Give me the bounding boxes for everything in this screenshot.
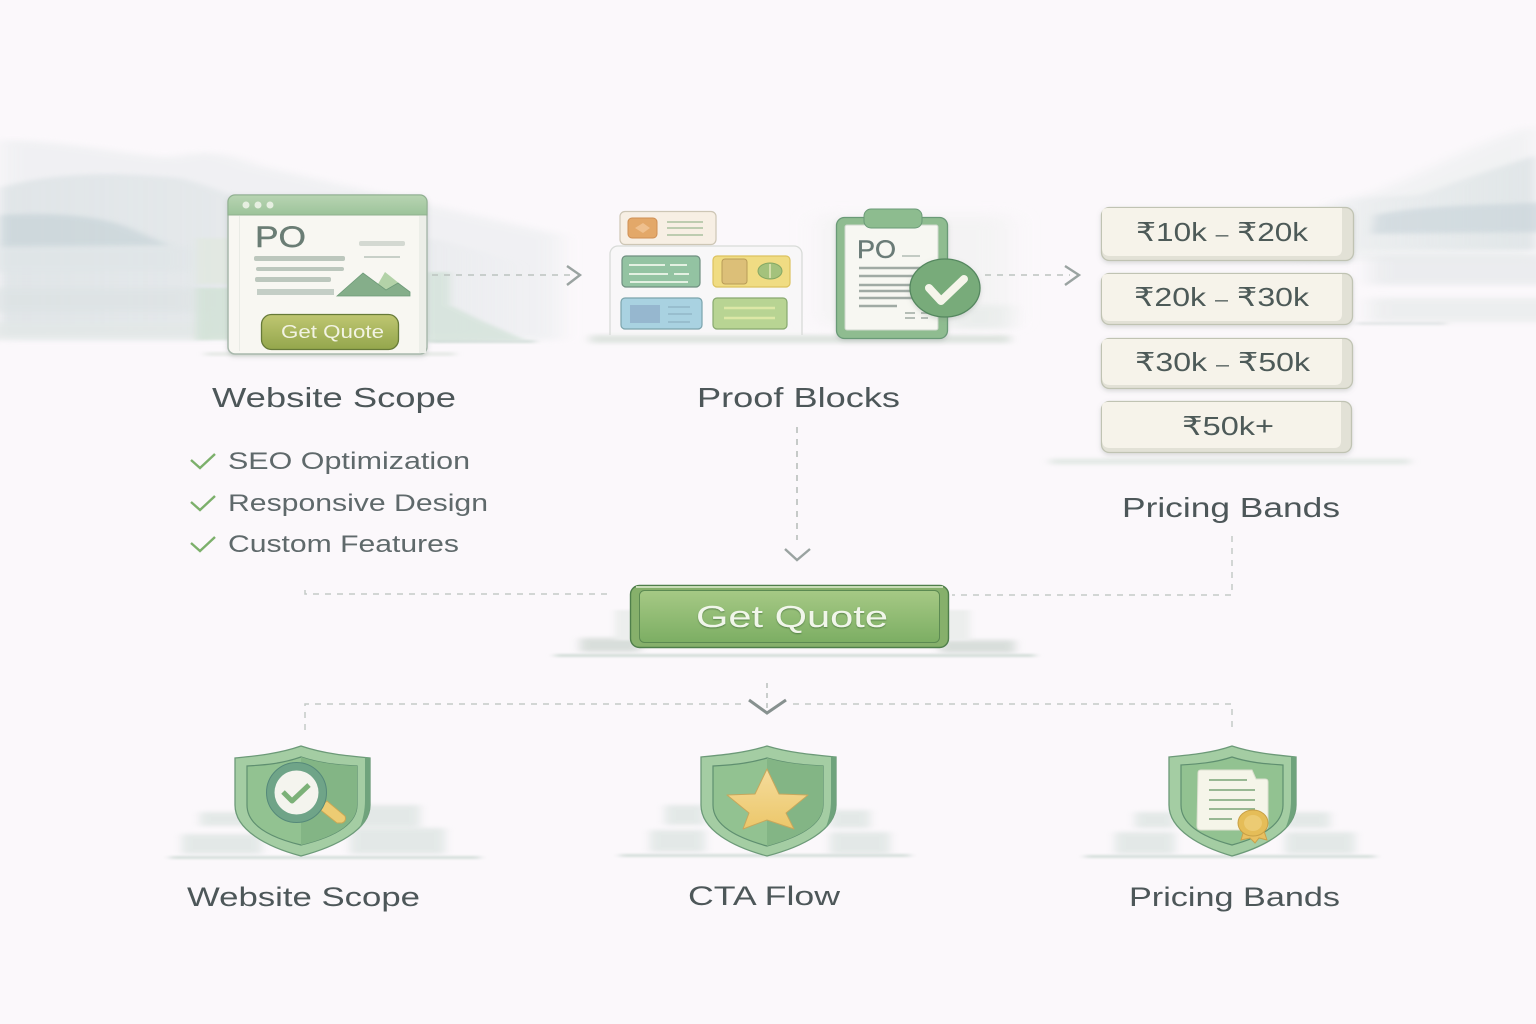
checklist: Custom Features <box>228 531 459 558</box>
checklist <box>191 448 488 558</box>
icon: shield with star <box>701 746 836 856</box>
icon: shield with certificate <box>1169 746 1296 856</box>
connector: pricing bands to get quote <box>952 536 1232 595</box>
icon: shield with magnifier <box>235 746 370 856</box>
heading: pricing bands: Pricing Bands <box>1122 492 1340 523</box>
price band 20k to 30k <box>1102 274 1352 324</box>
price band 50k plus: ₹50k+ <box>1182 411 1274 441</box>
price band 20k to 30k: ₹20k – ₹30k <box>1134 282 1310 312</box>
clipboard with check badge: PO <box>857 236 896 264</box>
checklist: SEO Optimization <box>228 448 470 475</box>
price band 10k to 20k <box>1102 208 1354 260</box>
connector: website scope to get quote <box>305 590 607 594</box>
arrow: scope to proof <box>432 266 580 285</box>
panel: pricing bands <box>1102 208 1354 523</box>
primary get quote button <box>555 586 1035 657</box>
arrow: proof blocks down to get quote <box>785 427 810 560</box>
checklist: Responsive Design <box>228 490 488 517</box>
clipboard with check badge <box>836 209 980 338</box>
price band 30k to 50k <box>1102 338 1352 388</box>
price band 10k to 20k: ₹10k – ₹20k <box>1136 217 1309 247</box>
arrow: proof to pricing <box>985 266 1079 285</box>
mini get quote button <box>262 314 398 350</box>
outcome: website scope <box>170 746 480 912</box>
connector: get quote down to outcomes <box>305 683 1232 730</box>
browser window mockup: PO <box>255 221 306 254</box>
browser window mockup <box>228 195 427 354</box>
heading: proof blocks: Proof Blocks <box>697 382 900 413</box>
label: pricing bands: Pricing Bands <box>1129 882 1340 912</box>
panel: proof blocks <box>610 209 980 413</box>
primary get quote button: Get Quote <box>696 599 888 634</box>
price band 30k to 50k: ₹30k – ₹50k <box>1135 347 1311 377</box>
mini get quote button: Get Quote <box>281 322 384 342</box>
outcome: pricing bands <box>1085 746 1375 912</box>
background: misty landscape <box>0 125 1536 464</box>
label: website scope: Website Scope <box>187 882 420 912</box>
panel: website scope <box>191 195 488 558</box>
label: cta flow: CTA Flow <box>688 881 841 911</box>
price band 50k plus <box>1102 402 1352 452</box>
outcome: cta flow <box>620 746 910 911</box>
proof cards tray <box>610 212 802 335</box>
heading: website scope: Website Scope <box>212 382 456 413</box>
